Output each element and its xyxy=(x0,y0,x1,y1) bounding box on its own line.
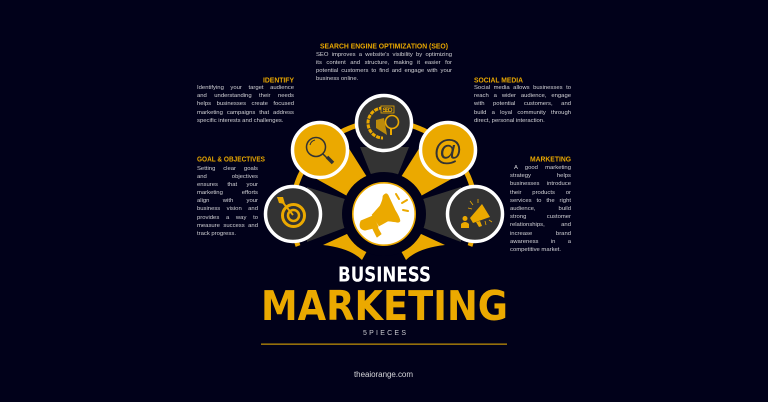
text: social media description xyxy=(474,85,571,124)
text: goal description: Setting clear goals xyxy=(197,166,258,172)
wedge: top grey xyxy=(360,147,409,177)
icon circle: magnifier xyxy=(292,122,348,178)
icon circle: marketer megaphone xyxy=(448,186,502,242)
text: marketing description: relationships, and xyxy=(510,222,571,228)
icon: at sign: @ xyxy=(433,135,463,167)
title: business: BUSINESS xyxy=(338,262,431,286)
shard: bottom left orange xyxy=(323,233,367,260)
text: identify description: Identifying your target audience xyxy=(197,85,294,91)
text: social media description: reach a wider audience, engage xyxy=(474,93,571,99)
underline xyxy=(261,344,507,345)
text: goal description: provides a way to xyxy=(197,215,258,221)
text: marketing description xyxy=(510,165,571,253)
text: SEO description: potential customers to find and engage with your xyxy=(316,68,452,74)
icon circle: target xyxy=(266,186,320,242)
wedge: upper left orange xyxy=(313,147,367,197)
heading: goal and objectives: GOAL & OBJECTIVES xyxy=(197,154,265,164)
title: marketing: MARKETING xyxy=(261,282,508,330)
text: identify description: marketing campaigns that address xyxy=(197,110,294,116)
text: marketing description: audience, build xyxy=(510,206,571,212)
shard: bottom right orange xyxy=(401,233,445,260)
text: goal description: and objectives xyxy=(197,174,258,180)
icon circle: SEO xyxy=(356,96,412,150)
text: identify description: specific interests and challenges. xyxy=(197,118,283,124)
text: identify description xyxy=(197,85,294,124)
wedge: far right grey xyxy=(420,187,461,242)
text: social media description: direct, personal interaction. xyxy=(474,118,545,124)
text: SEO description: business online. xyxy=(316,76,358,82)
text: goal description: marketing efforts xyxy=(197,190,258,196)
text: identify description: helps businesses create focused xyxy=(197,101,294,107)
heading: marketing: MARKETING xyxy=(530,154,571,164)
wedge: upper right orange xyxy=(401,147,455,197)
text: social media description: build a loyal community through xyxy=(474,110,571,116)
text: goal description: ensures that your xyxy=(197,182,258,188)
website credit: theaiorange.com xyxy=(354,370,413,379)
text: marketing description: businesses introduce xyxy=(510,181,571,187)
heading: search engine optimization: SEARCH ENGINE OPTIMIZATION (SEO) xyxy=(320,42,448,50)
icon circle: at sign xyxy=(420,122,476,178)
text: goal description: business vision and xyxy=(197,206,258,212)
heading: social media: SOCIAL MEDIA xyxy=(474,76,524,84)
text: marketing description: their products or xyxy=(510,190,571,196)
text: marketing description: competitive market. xyxy=(510,247,561,253)
text: goal description: track progress. xyxy=(197,231,236,237)
text: marketing description: services to the right xyxy=(510,198,571,204)
center hub with megaphone xyxy=(342,172,426,256)
icon: SEO gear and magnifier: SEO xyxy=(382,108,393,114)
text: marketing description: increase brand xyxy=(510,230,571,236)
subtitle: 5 pieces: 5PIECES xyxy=(363,330,406,337)
text: marketing description: awareness in a xyxy=(510,239,571,245)
text: social media description: with potential customers, and xyxy=(474,101,571,107)
text: SEO description: SEO improves a website's visibility by optimizing xyxy=(316,52,452,58)
text: SEO description xyxy=(316,52,452,82)
icon: large megaphone xyxy=(360,194,408,237)
text: marketing description: strategy helps xyxy=(510,173,571,179)
text: identify description: and understanding their needs xyxy=(197,93,294,99)
icon: target with arrow xyxy=(277,197,304,226)
orange outer arc xyxy=(292,121,476,246)
heading: identify: IDENTIFY xyxy=(263,76,294,84)
text: marketing description: strong customer xyxy=(510,214,571,220)
icon: magnifying glass xyxy=(306,138,333,163)
text: social media description: Social media allows businesses to xyxy=(474,85,571,91)
text: goal description: measure success and xyxy=(197,223,258,229)
text: SEO description: its content and structure, making it easier for xyxy=(316,60,452,66)
text: goal description: align with your xyxy=(197,198,258,204)
text: goal description xyxy=(197,166,258,237)
icon: person with megaphone xyxy=(461,199,492,228)
wedge: far left grey xyxy=(307,187,348,242)
text: marketing description: A good marketing xyxy=(514,165,571,171)
